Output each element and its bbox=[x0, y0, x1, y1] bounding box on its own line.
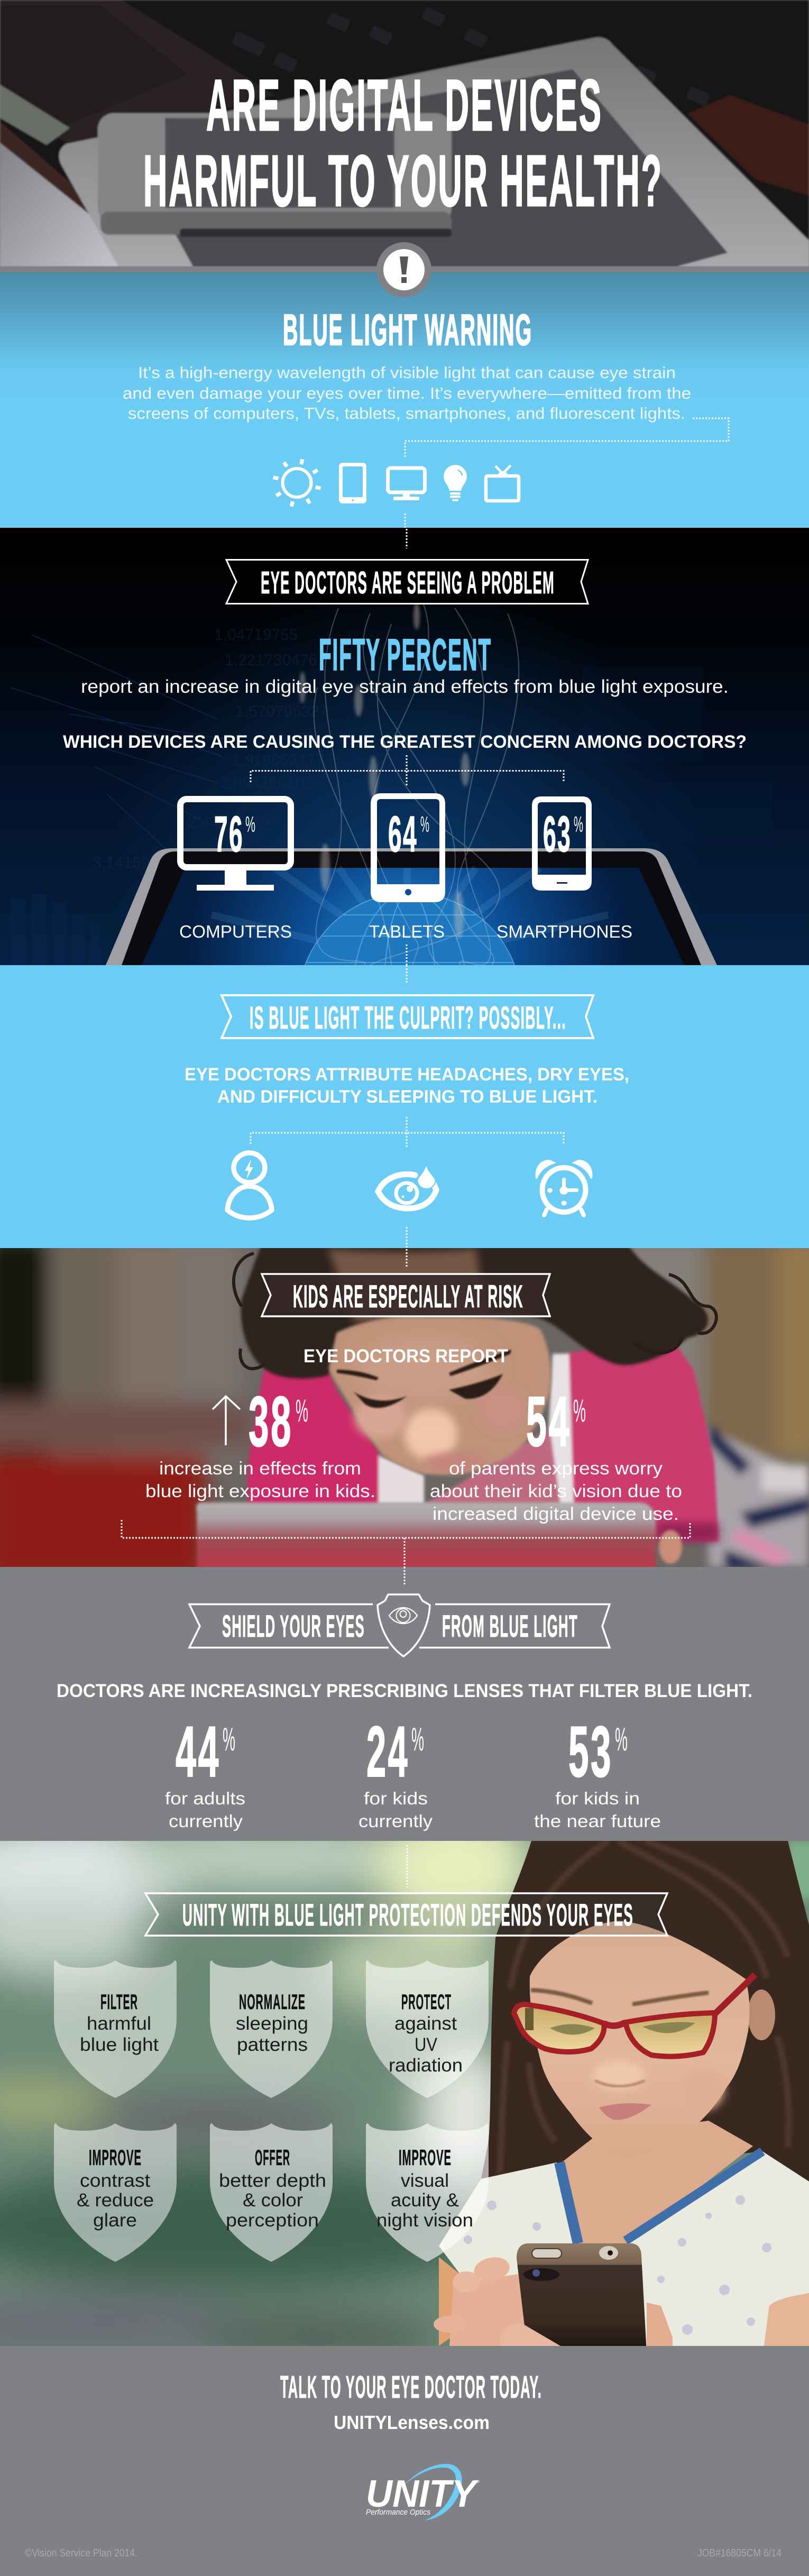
stat: 44 percent adults: % bbox=[223, 1721, 235, 1758]
stat: 54 percent of parents: about their kid’s vision due to bbox=[430, 1481, 682, 1501]
stat: 38 percent increase bbox=[145, 1382, 375, 1501]
background data visual: 2,094395102 bbox=[220, 774, 312, 792]
background data visual bbox=[11, 624, 658, 962]
background data visual: 1,04719755 bbox=[214, 626, 298, 644]
text: doctors are prescribing: DOCTORS ARE INCREASINGLY PRESCRIBING LENSES THAT FILTER BLUE LIGHT. bbox=[57, 1681, 752, 1701]
smartphone bbox=[500, 2243, 647, 2353]
shield: protect bbox=[366, 1960, 489, 2098]
stat: 54 percent of parents: of parents express worry bbox=[449, 1459, 663, 1479]
text: eye doctors attribute: AND DIFFICULTY SLEEPING TO BLUE LIGHT. bbox=[217, 1087, 597, 1107]
text: KIDS ARE ESPECIALLY AT RISK bbox=[293, 1279, 523, 1314]
dress bbox=[439, 2151, 809, 2346]
background data visual: 1,221730476 bbox=[225, 652, 317, 669]
stat: 53 percent future bbox=[534, 1711, 661, 1831]
stat: 24 percent kids bbox=[358, 1711, 433, 1831]
shield: offer: & color bbox=[243, 2190, 303, 2211]
shield: improve contrast: contrast bbox=[80, 2170, 150, 2191]
stat: 44 percent adults: currently bbox=[169, 1811, 243, 1831]
stat: 53 percent future: % bbox=[615, 1721, 628, 1758]
icon: headache bbox=[227, 1153, 272, 1218]
panel: girl with glasses photo bbox=[0, 1803, 809, 2359]
ribbon: kids are especially at risk bbox=[262, 1274, 550, 1316]
shield: filter: blue light bbox=[80, 2034, 159, 2055]
stat: 53 percent future: the near future bbox=[534, 1811, 661, 1831]
shield: improve contrast bbox=[54, 2123, 177, 2262]
text: blue light description bbox=[123, 363, 691, 423]
panel: blue light warning: BLUE LIGHT WARNING bbox=[283, 305, 532, 354]
panel: blue light warning bbox=[0, 242, 809, 528]
text: eye doctors report: EYE DOCTORS REPORT bbox=[304, 1346, 508, 1367]
face bbox=[530, 1921, 775, 2155]
chart: smartphones 63%: 63 bbox=[543, 806, 572, 863]
eyewear bbox=[514, 1975, 755, 2057]
logo: unity: Performance Optics bbox=[366, 2508, 430, 2517]
stat: 44 percent adults: for adults bbox=[165, 1789, 245, 1808]
hair bbox=[241, 1243, 708, 1379]
stat: 38 percent increase: 38 bbox=[249, 1382, 293, 1461]
light fibres bbox=[314, 603, 519, 965]
shield: normalize: sleeping bbox=[236, 2013, 308, 2034]
stat: 44 percent adults: 44 bbox=[176, 1711, 220, 1792]
neck bbox=[562, 2121, 753, 2243]
shield: filter: FILTER bbox=[100, 1991, 138, 2014]
shield: offer: perception bbox=[226, 2210, 319, 2231]
chart: tablets 64%: TABLETS bbox=[369, 922, 445, 941]
shield: normalize bbox=[210, 1960, 333, 2098]
chart: smartphones 63% bbox=[497, 796, 632, 941]
chart: smartphones 63%: SMARTPHONES bbox=[497, 922, 632, 941]
panel: is blue light the culprit bbox=[0, 965, 809, 1248]
stat: 24 percent kids: % bbox=[411, 1721, 424, 1758]
tablet in front of child bbox=[196, 1502, 656, 1571]
stat: 38 percent increase: blue light exposure in kids. bbox=[145, 1481, 375, 1501]
stat: 24 percent kids: currently bbox=[358, 1811, 433, 1831]
shield: protect: UV bbox=[415, 2034, 438, 2055]
arm and hand bbox=[434, 2254, 673, 2346]
ribbon: unity with blue light protection bbox=[145, 1893, 667, 1936]
hair bbox=[481, 1841, 809, 2181]
stat: 54 percent of parents: increased digital device use. bbox=[433, 1504, 679, 1524]
chart: computers 76%: 76 bbox=[214, 806, 244, 863]
floral fabric bbox=[706, 1423, 809, 1567]
icon: monitor bbox=[388, 468, 425, 500]
text: report increase: report an increase in digital eye strain and effects from blue light exposure. bbox=[81, 676, 729, 697]
shield: improve contrast: glare bbox=[93, 2210, 137, 2231]
shield: filter: harmful bbox=[87, 2013, 151, 2034]
stat: 54 percent of parents bbox=[430, 1382, 682, 1524]
icon: light bulb bbox=[444, 465, 467, 501]
text: blue light description: It’s a high-energy wavelength of visible light that can cause eye strain bbox=[138, 363, 676, 382]
title bbox=[143, 65, 663, 222]
logo: unity: ® bbox=[476, 2479, 480, 2484]
stat: 38 percent increase: % bbox=[296, 1393, 308, 1428]
copyright: ©Vision Service Plan 2014. bbox=[25, 2547, 137, 2559]
shield: improve acuity bbox=[366, 2123, 489, 2262]
background data visual: 2,44346095 bbox=[188, 814, 272, 831]
website url: UNITYLenses.com bbox=[334, 2412, 490, 2433]
shield: offer bbox=[210, 2123, 333, 2262]
chart: tablets 64%: % bbox=[420, 812, 429, 837]
question: which devices: WHICH DEVICES ARE CAUSING THE GREATEST CONCERN AMONG DOCTORS? bbox=[63, 732, 747, 752]
panel: shield your eyes bbox=[0, 1567, 809, 1841]
shield: improve contrast: IMPROVE bbox=[89, 2145, 142, 2170]
shield: normalize: patterns bbox=[237, 2034, 308, 2055]
shield: normalize: NORMALIZE bbox=[239, 1991, 306, 2014]
stat: 53 percent future: 53 bbox=[568, 1711, 613, 1792]
icon: warning exclamation bbox=[376, 242, 431, 297]
stat: 53 percent future: for kids in bbox=[555, 1789, 640, 1808]
panel: footer bbox=[0, 2346, 809, 2576]
ribbon: eye doctors are seeing a problem bbox=[226, 560, 588, 604]
shield: protect: against bbox=[394, 2013, 457, 2034]
ribbon: shield your eyes from blue light: SHIELD YOUR EYES bbox=[222, 1609, 365, 1644]
ribbon: shield your eyes from blue light bbox=[189, 1605, 610, 1648]
text: FIFTY PERCENT bbox=[319, 630, 492, 680]
chart: tablets 64%: 64 bbox=[388, 806, 418, 863]
shield: improve acuity: night vision bbox=[376, 2210, 473, 2231]
panel: kids are especially at risk photo bbox=[0, 1237, 809, 1581]
icon: sun bbox=[273, 459, 320, 507]
text: blue light description: and even damage your eyes over time. It’s everywhere—emitted from the bbox=[123, 384, 691, 402]
background data visual: 1,919862177 bbox=[232, 751, 324, 769]
shield: offer: better depth bbox=[219, 2170, 326, 2191]
chart: computers 76%: % bbox=[245, 812, 255, 837]
stat: 24 percent kids: 24 bbox=[366, 1711, 409, 1792]
icon: alarm clock bbox=[536, 1160, 592, 1215]
cardigan bbox=[247, 1327, 719, 1542]
panel: hero photo of devices bbox=[0, 0, 809, 267]
background tablet bbox=[106, 848, 717, 965]
chart: smartphones 63%: % bbox=[574, 812, 583, 837]
chart: computers 76% bbox=[179, 799, 292, 941]
stat: 24 percent kids: for kids bbox=[364, 1789, 428, 1808]
background data visual: 1,570796327 bbox=[235, 703, 328, 720]
icon: television bbox=[486, 465, 519, 501]
text: eye doctors attribute bbox=[185, 1065, 629, 1107]
shield: filter bbox=[54, 1960, 177, 2098]
face bbox=[329, 1316, 551, 1474]
stat: 44 percent adults bbox=[165, 1711, 245, 1831]
panel: eye doctors are seeing a problem bbox=[0, 528, 809, 965]
chart: tablets 64% bbox=[369, 793, 445, 941]
stat: 54 percent of parents: % bbox=[573, 1393, 586, 1428]
icon: dry eye bbox=[378, 1161, 436, 1208]
stat: 54 percent of parents: 54 bbox=[526, 1382, 571, 1461]
logo: unity: UNITY bbox=[366, 2473, 479, 2515]
shield: improve acuity: IMPROVE bbox=[399, 2145, 452, 2170]
chart: computers 76%: COMPUTERS bbox=[179, 922, 292, 941]
text: eye doctors attribute: EYE DOCTORS ATTRIBUTE HEADACHES, DRY EYES, bbox=[185, 1065, 629, 1085]
ribbon: is blue light the culprit bbox=[222, 995, 593, 1038]
shield: protect: PROTECT bbox=[401, 1991, 452, 2014]
background data visual: 3,14159 bbox=[93, 854, 150, 872]
shield: improve contrast: & reduce bbox=[77, 2190, 154, 2211]
job number: JOB#16805CM 6/14 bbox=[697, 2547, 782, 2559]
shield: protect: radiation bbox=[389, 2055, 463, 2076]
shield: offer: OFFER bbox=[255, 2145, 290, 2170]
stat: 38 percent increase: increase in effects from bbox=[159, 1459, 361, 1479]
shield: improve acuity: acuity & bbox=[391, 2190, 459, 2211]
text: blue light description: screens of computers, TVs, tablets, smartphones, and fluorescent lights. bbox=[128, 404, 685, 423]
ribbon: shield your eyes from blue light: FROM BLUE LIGHT bbox=[442, 1609, 578, 1644]
icon: shield with eye bbox=[378, 1594, 430, 1656]
icon: tablet bbox=[339, 463, 366, 503]
shield: improve acuity: visual bbox=[401, 2170, 449, 2191]
